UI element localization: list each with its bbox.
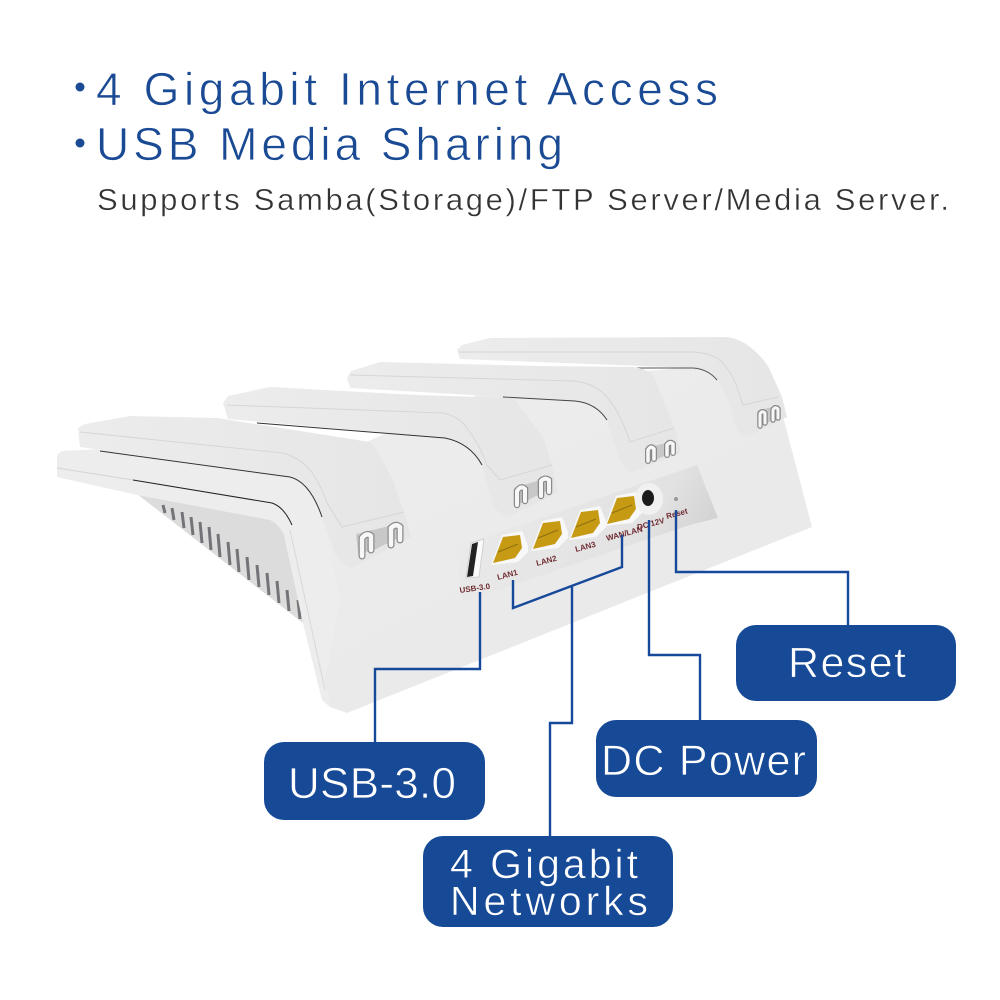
line to 4 Gigabit Networks [513, 535, 622, 836]
reset pinhole [674, 497, 678, 501]
label WAN/LAN: WAN/LAN [605, 525, 644, 543]
plate inner line [57, 468, 133, 480]
antenna clips [356, 405, 780, 556]
antenna 1 upper [78, 416, 411, 568]
button: USB-3.0: USB-3.0 [288, 759, 456, 808]
router body [137, 366, 812, 713]
antenna 3 [347, 362, 681, 472]
port recess [455, 465, 718, 602]
LAN3 port [569, 506, 606, 540]
USB port [466, 539, 484, 578]
button: Reset [736, 625, 956, 701]
seam under antenna 1 [100, 451, 322, 517]
label LAN2: LAN2 [535, 554, 558, 568]
clip 3 [645, 441, 676, 463]
label Reset: Reset [665, 507, 689, 521]
button: 4 Gigabit Networks: Networks [450, 878, 648, 924]
clip 1 [356, 523, 404, 556]
button: DC Power [596, 720, 817, 797]
clip 2 [514, 477, 552, 505]
button: 4 Gigabit Networks [423, 836, 673, 927]
title line 1: 4 Gigabit Internet Access [96, 63, 718, 115]
port labels [459, 507, 689, 595]
connector lines [375, 510, 848, 836]
vent slots [163, 505, 300, 619]
LAN2 port [531, 517, 568, 551]
vent side panel [137, 494, 303, 623]
antenna 2 [223, 387, 558, 516]
DC jack [635, 483, 663, 515]
clip 4 [757, 405, 780, 427]
label LAN1: LAN1 [496, 568, 519, 582]
label USB-3.0: USB-3.0 [459, 582, 491, 595]
subtitle: Supports Samba(Storage)/FTP Server/Media Server. [97, 182, 949, 217]
LAN1 port [491, 531, 528, 565]
button: DC Power: DC Power [601, 737, 806, 785]
bullet 1 [76, 82, 84, 92]
heading block [76, 63, 949, 217]
button: 4 Gigabit Networks: 4 Gigabit [450, 841, 639, 887]
title line 2: USB Media Sharing [96, 118, 563, 170]
seam on lower plate [133, 480, 292, 525]
router illustration [57, 337, 812, 713]
line to USB-3.0 [375, 592, 480, 742]
plate outer curve edge [290, 530, 325, 690]
button: Reset: Reset [788, 639, 906, 687]
label DC 12V: DC 12V [636, 516, 666, 532]
line to DC Power [649, 520, 700, 720]
rear antenna 4 [457, 337, 787, 437]
line to Reset [676, 510, 848, 625]
bullet 2 [76, 138, 84, 148]
WAN port [605, 492, 642, 526]
recess lower lip [463, 518, 722, 628]
antenna 1 lower plate [57, 449, 340, 707]
label LAN3: LAN3 [574, 540, 597, 554]
button: USB-3.0 [264, 742, 485, 820]
